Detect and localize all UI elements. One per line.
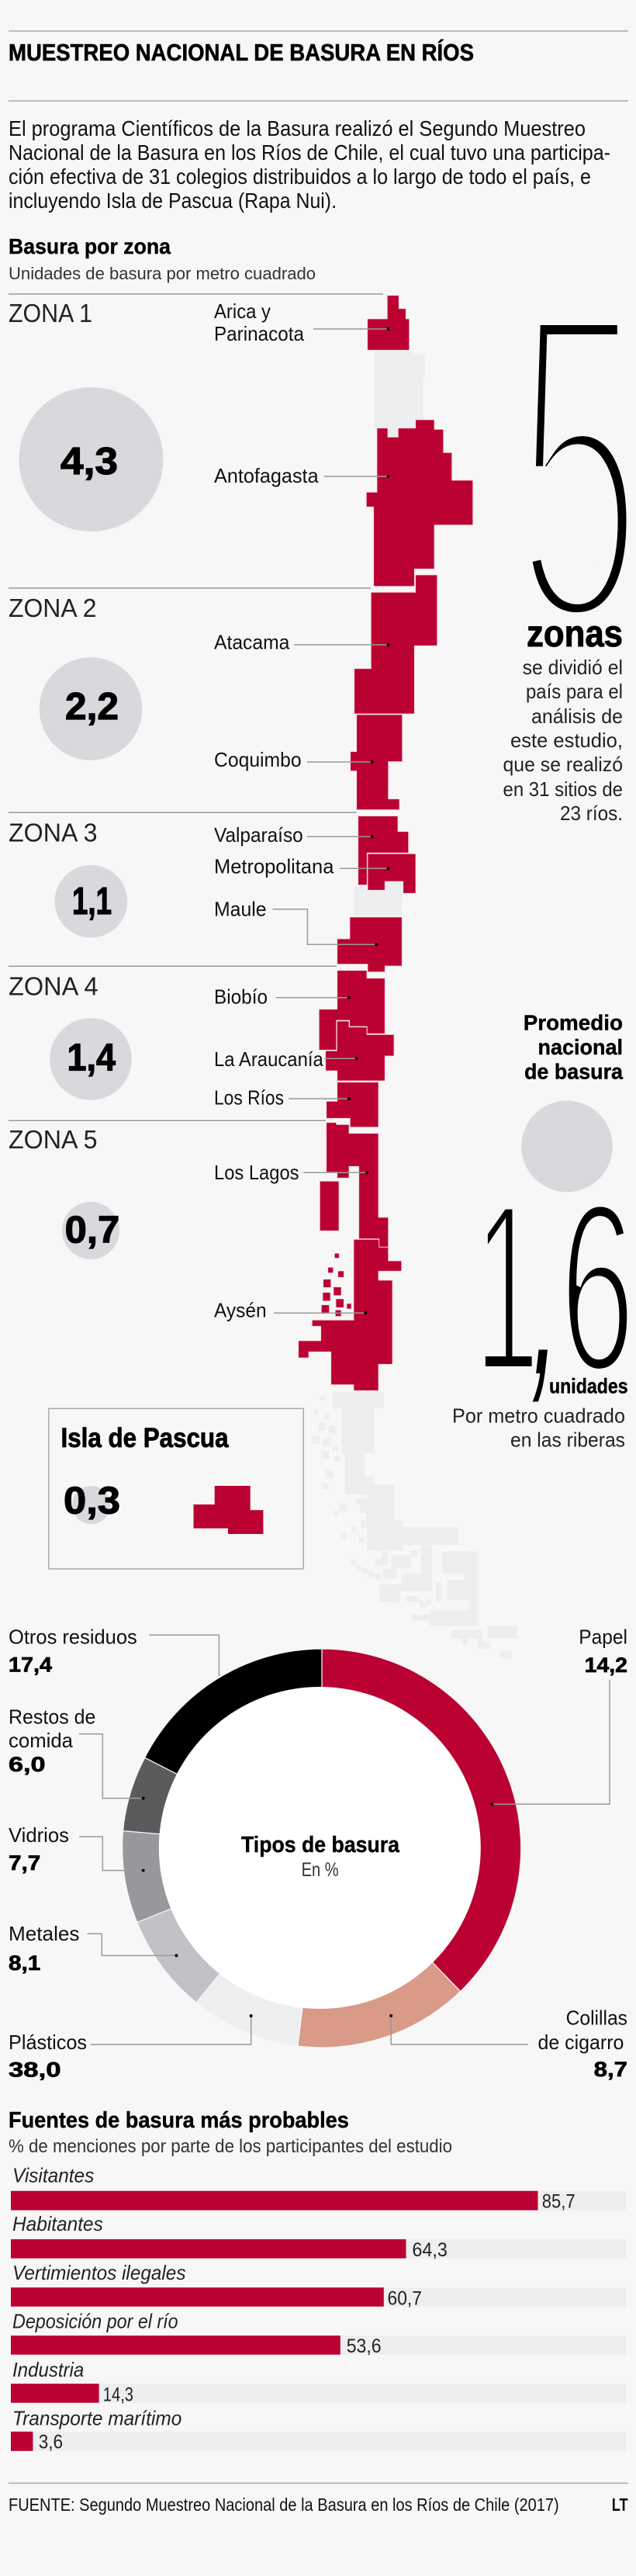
- map: Maule: [337, 917, 402, 972]
- zone 3: ZONA 3: [9, 819, 98, 847]
- zone 2: 2,2: [65, 686, 119, 728]
- intro text: El programa Científicos de la Basura realizó el Segundo Muestreo: [9, 116, 586, 140]
- label: Arica y Parinacota: Arica y: [214, 299, 271, 323]
- callout: 5 zonas: [503, 614, 623, 825]
- zone 1: ZONA 1: [9, 299, 92, 328]
- label: restos de comida: 6,0: [9, 1753, 46, 1776]
- label: papel: [490, 1625, 627, 1806]
- label: Maule: [214, 898, 378, 946]
- callout: promedio nacional: de basura: [524, 1060, 623, 1084]
- map: Chiloé: [320, 1181, 339, 1231]
- label: vidrios: 7,7: [9, 1851, 40, 1875]
- intro text: ción efectiva de 31 colegios distribuidos a lo largo de todo el país, e: [9, 164, 591, 189]
- label: papel: 14,2: [585, 1653, 627, 1677]
- callout: unidades por metro cuadrado: [452, 1375, 628, 1451]
- callout: 5 zonas: este estudio,: [510, 729, 623, 752]
- label: metales: [9, 1922, 178, 1975]
- bar: industria: 14,3: [103, 2384, 133, 2405]
- callout: 5 zonas: se dividió el: [523, 656, 623, 679]
- callout: unidades por metro cuadrado: en las riberas: [510, 1428, 625, 1451]
- map: grey southern region: [312, 1391, 517, 1659]
- intro text: [9, 116, 610, 213]
- label: metales: 8,1: [9, 1951, 40, 1975]
- bar: visitantes: Visitantes: [12, 2164, 94, 2187]
- bar: vertimientos ilegales: 60,7: [388, 2288, 422, 2310]
- footer rule: [9, 2482, 628, 2484]
- donut chart: tipos de basura: En %: [302, 1859, 339, 1881]
- label: restos de comida: [9, 1705, 145, 1800]
- label: restos de comida: Restos de: [9, 1705, 95, 1729]
- bar: deposición por el río: Deposición por el río: [12, 2309, 178, 2332]
- label: Maule: Maule: [214, 898, 267, 921]
- label: Los Lagos: Los Lagos: [214, 1161, 299, 1184]
- label: plásticos: 38,0: [9, 2058, 60, 2082]
- callout: 5 zonas: que se realizó: [503, 753, 623, 776]
- label: Biobío: Biobío: [214, 985, 268, 1008]
- label: Los Ríos: [214, 1085, 351, 1109]
- header rule bottom: [9, 100, 628, 102]
- label: colillas de cigarro: de cigarro: [538, 2031, 624, 2054]
- big number: 1,6: 1: [475, 1154, 539, 1421]
- zone 1: [9, 299, 163, 531]
- panel: Isla de Pascua: [49, 1408, 303, 1569]
- label: colillas de cigarro: Colillas: [566, 2006, 627, 2029]
- label: Los Lagos: [214, 1161, 368, 1184]
- donut chart: tipos de basura: Tipos de basura: [241, 1833, 400, 1858]
- label: Metropolitana: Metropolitana: [214, 855, 334, 878]
- bar: visitantes: [11, 2164, 626, 2212]
- label: Antofagasta: [214, 464, 389, 487]
- map: Arica y Parinacota: [368, 296, 410, 350]
- bar: visitantes: 85,7: [542, 2190, 576, 2212]
- source note: FUENTE: Segundo Muestreo Nacional de la Basura en los Ríos de Chile (2017): [9, 2495, 559, 2515]
- bar: transporte marítimo: [11, 2407, 626, 2453]
- label: vidrios: Vidrios: [9, 1823, 69, 1847]
- bar: industria: Industria: [12, 2358, 84, 2381]
- zone 4: 1,4: [67, 1037, 116, 1079]
- bar: transporte marítimo: Transporte marítimo: [12, 2407, 181, 2430]
- label: Aysén: [214, 1298, 367, 1321]
- label: Aysén: Aysén: [214, 1298, 267, 1321]
- map: Atacama: [354, 575, 437, 714]
- map: Antofagasta: [366, 420, 473, 587]
- map: Los Lagos: [327, 1123, 389, 1247]
- zone 4: [9, 972, 132, 1100]
- map: grey central region: [354, 881, 403, 916]
- label: plásticos: Plásticos: [9, 2031, 87, 2054]
- zone 3: [9, 819, 127, 937]
- callout: 5 zonas: zonas: [527, 614, 623, 655]
- label: Valparaíso: Valparaíso: [214, 823, 303, 847]
- panel: Isla de Pascua: Isla de Pascua: [60, 1423, 229, 1453]
- label: restos de comida: comida: [9, 1729, 74, 1752]
- map: Los Ríos: [327, 1082, 378, 1127]
- bar: vertimientos ilegales: [11, 2261, 626, 2310]
- label: metales: Metales: [9, 1922, 79, 1945]
- big number: 1,6: 6: [560, 1155, 635, 1422]
- map of Chile: [299, 296, 517, 1659]
- bar: deposición por el río: [11, 2309, 626, 2357]
- bar: deposición por el río: 53,6: [347, 2335, 382, 2357]
- label: colillas de cigarro: [389, 2006, 627, 2081]
- callout: unidades por metro cuadrado: Por metro cuadrado: [452, 1404, 625, 1427]
- label: Atacama: [214, 631, 389, 654]
- label: Coquimbo: [214, 748, 374, 771]
- callout: 5 zonas: análisis de: [531, 705, 623, 728]
- intro text: incluyendo Isla de Pascua (Rapa Nui).: [9, 189, 337, 213]
- bar: industria: [11, 2358, 626, 2405]
- callout: promedio nacional: Promedio: [524, 1011, 623, 1035]
- callout: 5 zonas: país para el: [526, 680, 623, 703]
- subheading: menciones: % de menciones por parte de los participantes del estudio: [9, 2136, 452, 2157]
- zone 3: 1,1: [72, 881, 112, 923]
- heading: basura por zona: Basura por zona: [9, 234, 171, 258]
- label: Arica y Parinacota: [214, 299, 389, 345]
- bar: vertimientos ilegales: Vertimientos ilegales: [12, 2261, 186, 2284]
- bar: habitantes: Habitantes: [12, 2212, 103, 2235]
- header rule top: [9, 30, 628, 32]
- zone 2: ZONA 2: [9, 594, 96, 623]
- label: vidrios: [9, 1823, 145, 1875]
- bar: habitantes: [11, 2212, 626, 2261]
- label: Antofagasta: Antofagasta: [214, 464, 319, 487]
- donut labels: [9, 1625, 627, 2082]
- label: La Araucanía: La Araucanía: [214, 1047, 323, 1071]
- label: Coquimbo: Coquimbo: [214, 748, 302, 771]
- title: MUESTREO NACIONAL DE BASURA EN RÍOS: [9, 39, 474, 66]
- map: Aysén: [299, 1239, 402, 1390]
- label: Arica y Parinacota: Parinacota: [214, 322, 304, 345]
- label: otros residuos: Otros residuos: [9, 1625, 137, 1648]
- label: Valparaíso: [214, 823, 374, 847]
- callout: promedio nacional: [521, 1011, 623, 1192]
- label: colillas de cigarro: 8,7: [594, 2058, 627, 2081]
- zone 5: [9, 1126, 119, 1259]
- zone 1: 4,3: [60, 441, 118, 483]
- heading: fuentes de basura: Fuentes de basura más probables: [9, 2108, 349, 2133]
- map: grey northern region: [374, 351, 425, 437]
- donut chart: tipos de basura: [123, 1649, 521, 2048]
- panel: Isla de Pascua: 0,3: [64, 1480, 120, 1522]
- zone 2: [9, 594, 142, 760]
- credit: LT: LT: [612, 2495, 628, 2515]
- map: Valparaíso: [358, 816, 409, 885]
- big number: 1,6: [475, 1154, 635, 1422]
- callout: promedio nacional: nacional: [538, 1035, 623, 1059]
- label: plásticos: [9, 2014, 253, 2082]
- map: La Araucanía: [326, 1021, 394, 1081]
- map: Coquimbo: [351, 715, 403, 810]
- label: Atacama: Atacama: [214, 631, 290, 654]
- map: Metropolitana: [368, 853, 416, 893]
- big number: 1,6: ,: [522, 1173, 576, 1421]
- label: Los Ríos: Los Ríos: [214, 1085, 284, 1109]
- label: Biobío: [214, 985, 351, 1008]
- zone divider lines: [9, 294, 383, 1120]
- bar chart: fuentes: [11, 2164, 626, 2453]
- callout: 5 zonas: 23 ríos.: [560, 802, 623, 825]
- bar: habitantes: 64,3: [412, 2239, 448, 2261]
- region labels and leaders: [214, 299, 389, 1321]
- zone 4: ZONA 4: [9, 972, 99, 1001]
- bar: transporte marítimo: 3,6: [39, 2432, 63, 2453]
- subheading: unidades: Unidades de basura por metro cuadrado: [9, 264, 316, 283]
- label: Metropolitana: [214, 855, 389, 878]
- label: otros residuos: 17,4: [9, 1653, 52, 1676]
- label: papel: Papel: [579, 1625, 627, 1648]
- zone 5: ZONA 5: [9, 1126, 98, 1155]
- map: Biobío: [319, 971, 385, 1050]
- zone 5: 0,7: [65, 1210, 119, 1252]
- label: otros residuos: [9, 1625, 219, 1676]
- callout: 5 zonas: en 31 sitios de: [503, 777, 623, 801]
